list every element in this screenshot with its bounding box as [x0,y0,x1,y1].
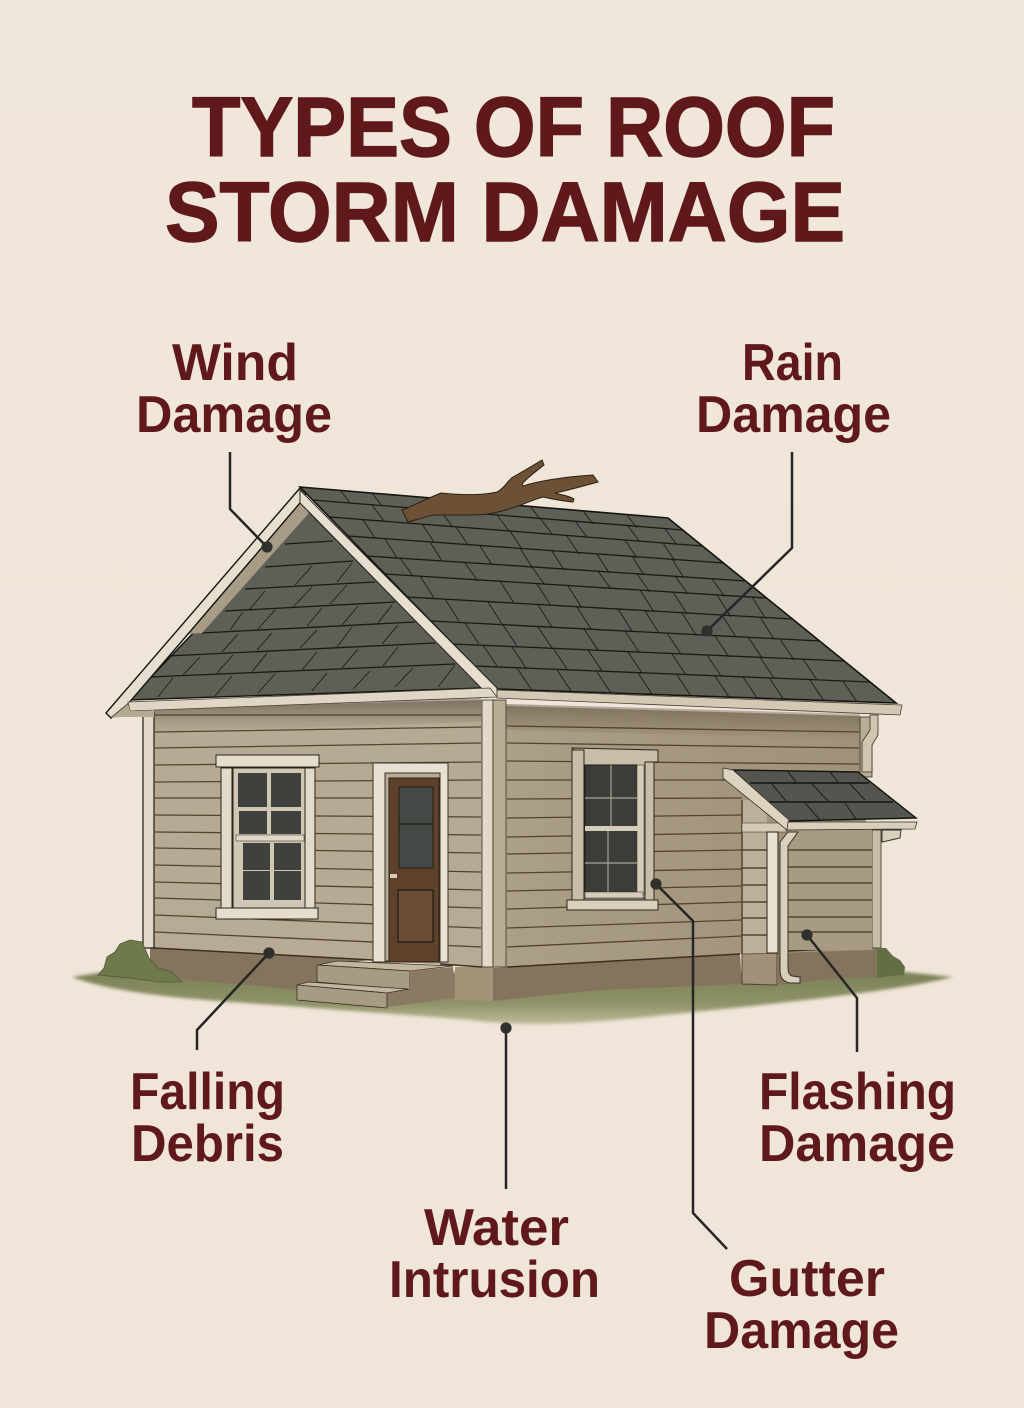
label: falling debris [130,1063,285,1173]
label: water intrusion: Water [424,1199,569,1257]
foundation: porch block [742,953,777,985]
leader: wind [230,452,273,553]
label: gutter damage: Damage [704,1302,899,1360]
ground: grass [72,972,953,1024]
bush: left [98,940,182,982]
porch post [767,832,778,953]
label: rain damage: Rain [742,334,843,392]
title: TYPES OF ROOF [192,80,835,174]
label: water intrusion [389,1199,600,1309]
fallen branch [402,460,598,522]
title: STORM DAMAGE [165,165,845,259]
eave left [128,688,497,711]
label: wind damage: Wind [172,334,298,392]
left rake fascia [106,488,306,718]
left window [216,755,319,919]
porch wall [742,800,872,954]
left corner board [143,712,154,948]
right corner board [860,715,881,948]
bush: right [877,948,905,978]
label: flashing damage [759,1063,956,1173]
leader: flashing damage [801,929,857,1052]
label: flashing damage: Damage [759,1115,955,1173]
label: gutter damage [704,1250,899,1360]
label: falling debris: Debris [131,1115,284,1173]
label: rain damage: Damage [696,386,891,444]
foundation: left [150,947,372,990]
label: flashing damage: Flashing [759,1063,956,1121]
leader: falling debris [197,947,275,1050]
label: gutter damage: Gutter [729,1250,885,1308]
title [165,80,845,259]
foundation: far right [777,947,877,985]
label: falling debris: Falling [130,1063,285,1121]
foundation: center [455,967,493,1001]
main roof slope [300,487,896,703]
leader: water intrusion [500,1022,512,1189]
leader: rain [701,452,792,637]
right rake fascia [300,490,497,697]
label: wind damage: Damage [136,386,332,444]
foundation: right [493,954,742,1001]
door [373,763,448,962]
gable roof [129,503,482,700]
label: wind damage [136,334,332,444]
steps [297,961,455,1008]
label: water intrusion: Intrusion [389,1251,600,1309]
leader: gutter damage [650,878,727,1249]
right wall [506,704,873,967]
downpipe [780,832,800,983]
label: rain damage [696,334,891,444]
porch roof [723,768,917,830]
right side gutter [882,830,901,842]
eave right [497,690,902,715]
right window [567,748,658,910]
left wall [154,698,482,967]
corner boards center [482,700,506,967]
illustration: house [72,460,953,1024]
